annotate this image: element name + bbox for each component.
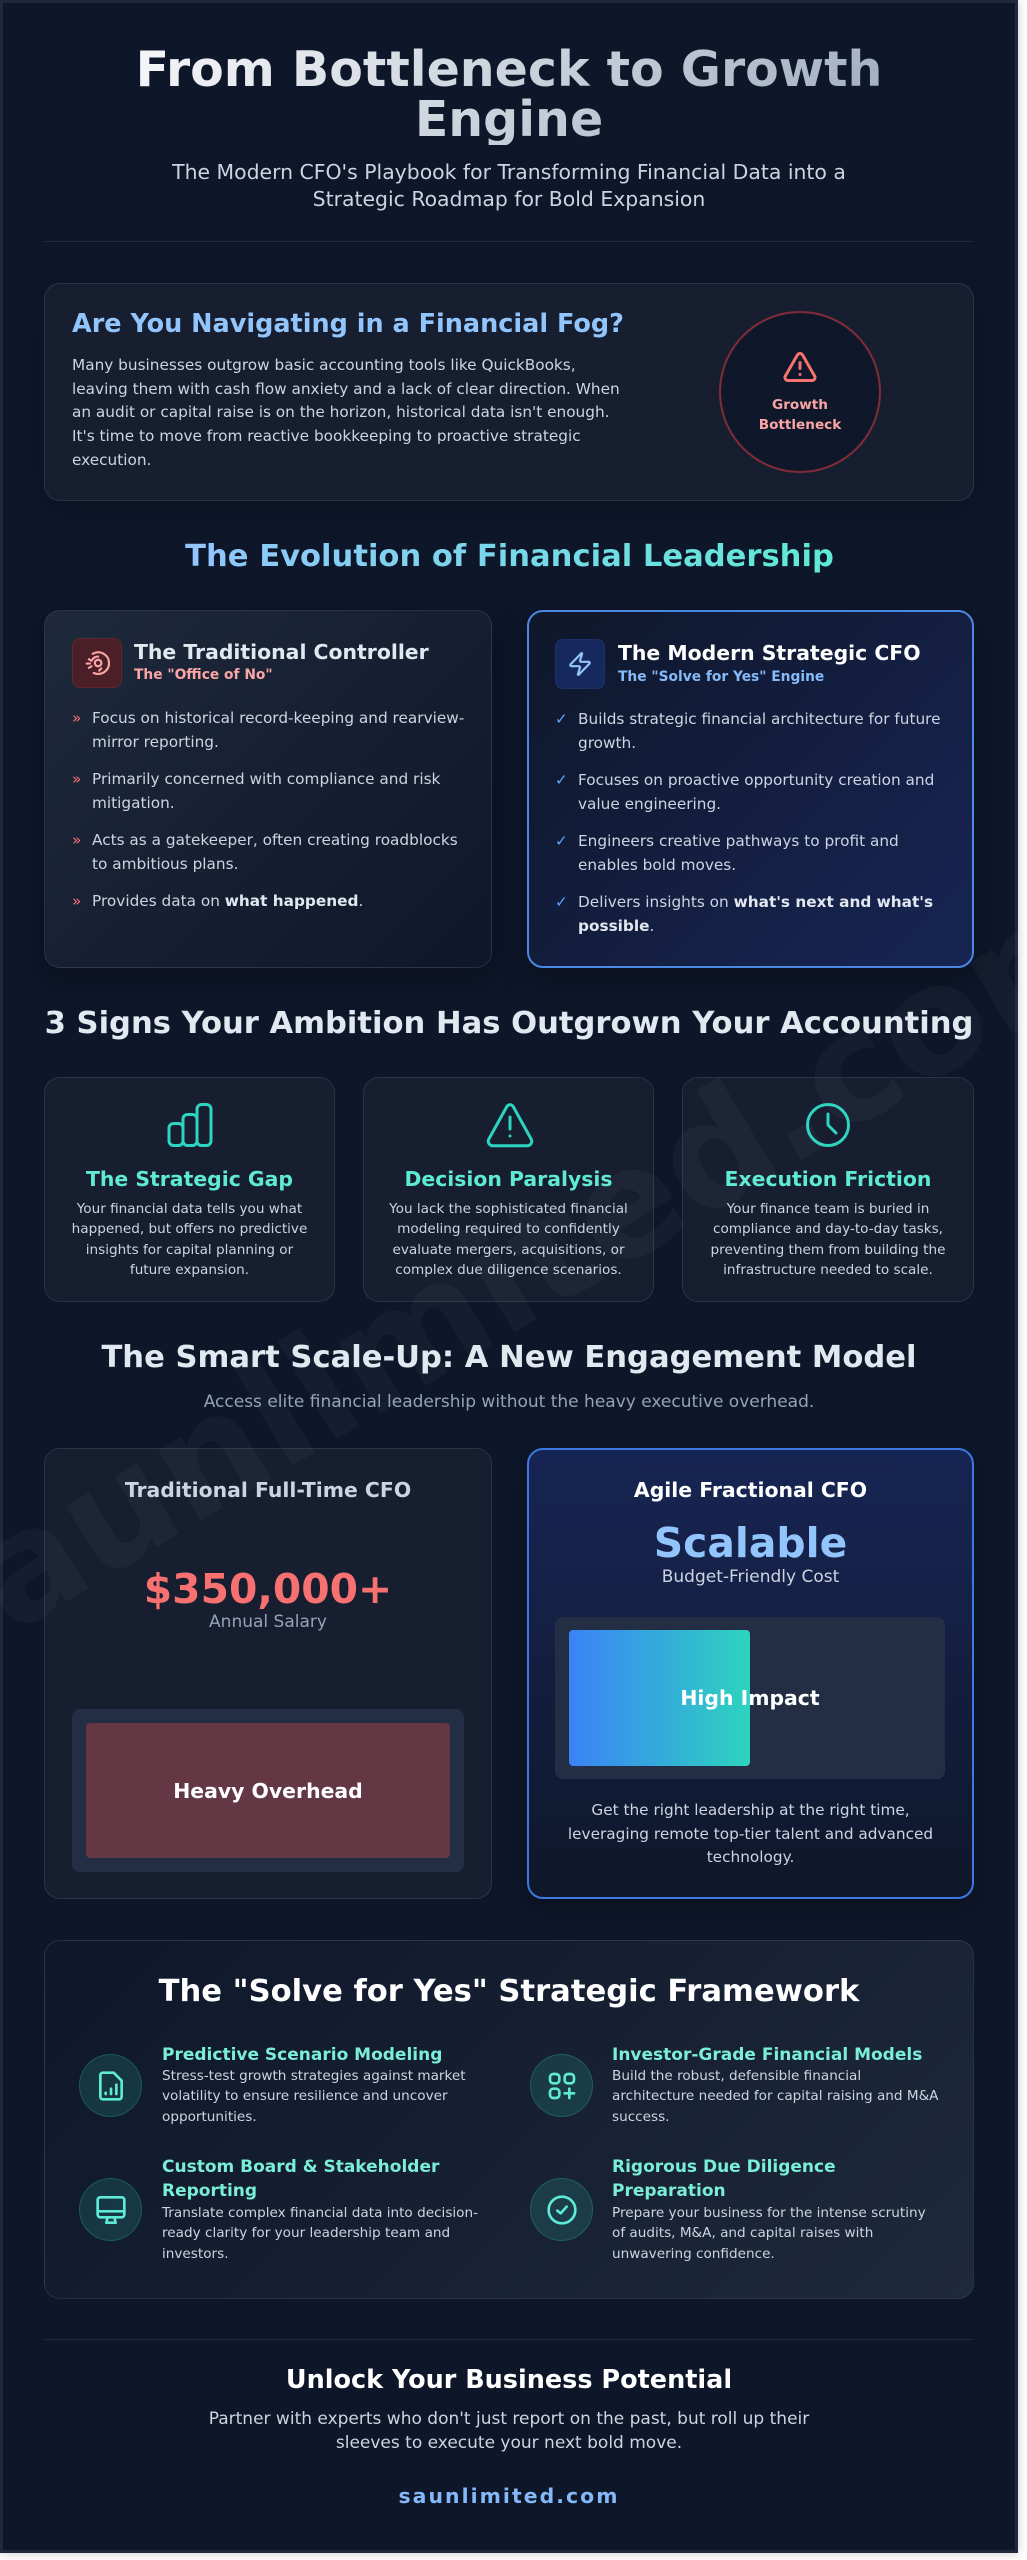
item: board reporting bbox=[162, 2157, 478, 2262]
icon: monitor bbox=[79, 2178, 142, 2241]
item heading: Custom Board & Stakeholder bbox=[162, 2157, 439, 2177]
trait 4: possible. bbox=[578, 917, 654, 935]
trait 4: Delivers insights on what's next and what's bbox=[578, 893, 933, 911]
item text bbox=[162, 2205, 478, 2262]
text: execution friction: compliance and day-to-day tasks, bbox=[713, 1221, 943, 1237]
trait 3 bbox=[555, 832, 899, 874]
callout: growth bottleneck bbox=[719, 311, 881, 473]
item text bbox=[612, 2205, 926, 2262]
link: website: saunlimited.com bbox=[398, 2484, 620, 2508]
heading: evolution: The Evolution of Financial Leadership bbox=[185, 539, 834, 574]
heading: traditional cfo: Traditional Full-Time CFO bbox=[125, 1478, 411, 1502]
panel: agile fractional cfo bbox=[527, 1448, 974, 1899]
item text: Build the robust, defensible financial bbox=[612, 2068, 861, 2084]
trait 3: Acts as a gatekeeper, often creating roadblocks bbox=[92, 831, 458, 849]
icon: check circle bbox=[530, 2178, 593, 2241]
bar label: High Impact bbox=[680, 1686, 820, 1710]
text: financial fog: leaving them with cash flow anxiety and a lack of clear direction. When bbox=[72, 380, 620, 398]
panel: decision paralysis bbox=[363, 1077, 654, 1302]
title: Engine bbox=[415, 91, 603, 148]
item text: volatility to ensure resilience and uncover bbox=[162, 2088, 448, 2104]
item heading: Preparation bbox=[612, 2181, 726, 2201]
text: call to action: sleeves to execute your next bold move. bbox=[336, 2433, 682, 2453]
label: growth bottleneck bbox=[759, 397, 842, 433]
trait 1: mirror reporting. bbox=[92, 733, 219, 751]
trait 1 bbox=[72, 709, 464, 751]
caption: budget-friendly: Budget-Friendly Cost bbox=[662, 1567, 839, 1587]
text: call to action bbox=[209, 2409, 810, 2453]
caption: annual salary: Annual Salary bbox=[209, 1612, 327, 1632]
text: decision paralysis: evaluate mergers, acquisitions, or bbox=[392, 1242, 625, 1258]
trait 1: Focus on historical record-keeping and rearview- bbox=[92, 709, 464, 727]
panel: traditional full-time cfo bbox=[44, 1448, 492, 1899]
list: controller traits: » bbox=[72, 892, 81, 910]
text: execution friction: Your finance team is buried in bbox=[727, 1201, 929, 1217]
item heading bbox=[612, 2157, 836, 2201]
panel: modern strategic cfo bbox=[527, 610, 974, 968]
panel: execution friction bbox=[682, 1077, 974, 1302]
text: financial fog: Many businesses outgrow basic accounting tools like QuickBooks, bbox=[72, 356, 576, 374]
heading: traditional controller: The Traditional Controller bbox=[134, 640, 429, 664]
icon: lightning badge bbox=[555, 639, 605, 689]
item: due diligence bbox=[612, 2157, 926, 2262]
item heading bbox=[162, 2157, 440, 2201]
list: cfo traits: ✓ bbox=[555, 893, 568, 911]
trait 4 bbox=[555, 893, 933, 935]
heading: modern cfo: The Modern Strategic CFO bbox=[618, 641, 921, 665]
icon: clock bbox=[806, 1103, 850, 1147]
text: agile cfo: technology. bbox=[707, 1848, 794, 1866]
subtitle: The Modern CFO's Playbook for Transforming Financial Data into a bbox=[172, 160, 846, 184]
item text: architecture needed for capital raising and M&A bbox=[612, 2088, 938, 2104]
text: financial fog: an audit or capital raise is on the horizon, historical data isn't enough. bbox=[72, 403, 610, 421]
heading: execution friction: Execution Friction bbox=[725, 1167, 931, 1191]
heading: smart scale-up: The Smart Scale-Up: A New Engagement Model bbox=[101, 1340, 917, 1375]
list: controller traits: » bbox=[72, 709, 81, 727]
heading: three signs: 3 Signs Your Ambition Has Outgrown Your Accounting bbox=[45, 1006, 973, 1041]
trait 3: Engineers creative pathways to profit and bbox=[578, 832, 899, 850]
text: execution friction: preventing them from building the bbox=[711, 1242, 945, 1258]
text: call to action: Partner with experts who don't just report on the past, but roll up their bbox=[209, 2409, 809, 2429]
text: decision paralysis: modeling required to confidently bbox=[397, 1221, 620, 1237]
trait 2: Focuses on proactive opportunity creation and bbox=[578, 771, 934, 789]
text: execution friction bbox=[711, 1201, 945, 1278]
heading: financial fog: Are You Navigating in a Financial Fog? bbox=[72, 309, 624, 339]
subheading: office of no: The "Office of No" bbox=[134, 667, 273, 683]
panel: traditional controller bbox=[44, 610, 492, 968]
trait 2: Primarily concerned with compliance and risk bbox=[92, 770, 440, 788]
panel: financial fog bbox=[44, 283, 974, 501]
heading: agile cfo: Agile Fractional CFO bbox=[634, 1478, 867, 1502]
title: From Bottleneck to Growth bbox=[136, 41, 882, 98]
label: growth bottleneck: Growth bbox=[772, 397, 828, 413]
item text: Translate complex financial data into decision- bbox=[162, 2205, 478, 2221]
item heading: Predictive Scenario Modeling bbox=[162, 2045, 442, 2065]
text: agile cfo: Get the right leadership at the right time, bbox=[591, 1801, 910, 1819]
text: decision paralysis bbox=[389, 1201, 628, 1278]
text: financial fog: It's time to move from reactive bookkeeping to proactive strategic bbox=[72, 427, 581, 445]
item heading: Reporting bbox=[162, 2181, 257, 2201]
trait 3: to ambitious plans. bbox=[92, 855, 238, 873]
item text: of audits, M&A, and capital raises with bbox=[612, 2225, 873, 2241]
bar: heavy overhead bbox=[72, 1709, 464, 1872]
item text bbox=[162, 2068, 466, 2125]
trait 1: growth. bbox=[578, 734, 636, 752]
figure: scalable: Scalable bbox=[654, 1519, 847, 1567]
icon: warning triangle bbox=[783, 352, 816, 382]
text: strategic gap: future expansion. bbox=[130, 1262, 249, 1278]
heading: decision paralysis: Decision Paralysis bbox=[404, 1167, 613, 1191]
text: strategic gap bbox=[72, 1201, 307, 1278]
item text: Prepare your business for the intense scrutiny bbox=[612, 2205, 926, 2221]
item: predictive scenario modeling bbox=[162, 2045, 466, 2125]
icon: document chart bbox=[79, 2054, 142, 2117]
icon: controller badge bbox=[72, 638, 122, 688]
trait 2: mitigation. bbox=[92, 794, 175, 812]
label: growth bottleneck: Bottleneck bbox=[759, 417, 841, 433]
item text: Stress-test growth strategies against market bbox=[162, 2068, 466, 2084]
text: decision paralysis: You lack the sophisticated financial bbox=[389, 1201, 628, 1217]
list: cfo traits: ✓ bbox=[555, 771, 568, 789]
subheading: solve for yes: The "Solve for Yes" Engine bbox=[618, 669, 824, 685]
icon: bars bbox=[168, 1103, 212, 1147]
trait 1 bbox=[555, 710, 941, 752]
panel: strategic gap bbox=[44, 1077, 335, 1302]
item text: ready clarity for your leadership team and bbox=[162, 2225, 450, 2241]
bar fill bbox=[569, 1630, 750, 1766]
subheading: smart scale-up: Access elite financial leadership without the heavy executive overhead. bbox=[204, 1392, 814, 1412]
heading: framework: The "Solve for Yes" Strategic Framework bbox=[159, 1974, 859, 2009]
text: agile cfo: leveraging remote top-tier talent and advanced bbox=[568, 1825, 933, 1843]
list: cfo traits: ✓ bbox=[555, 832, 568, 850]
bar: high impact bbox=[555, 1617, 945, 1779]
text: execution friction: infrastructure needed to scale. bbox=[723, 1262, 933, 1278]
icon: warning triangle bbox=[486, 1103, 534, 1148]
trait 2 bbox=[72, 770, 440, 812]
text: financial fog bbox=[72, 356, 620, 469]
panel: solve for yes framework bbox=[44, 1940, 974, 2299]
text: agile cfo bbox=[568, 1801, 933, 1866]
heading: call to action: Unlock Your Business Potential bbox=[286, 2365, 732, 2395]
trait 3: enables bold moves. bbox=[578, 856, 736, 874]
item text: unwavering confidence. bbox=[612, 2246, 775, 2262]
list: controller traits: » bbox=[72, 770, 81, 788]
list: cfo traits bbox=[555, 710, 941, 935]
text: strategic gap: Your financial data tells you what bbox=[77, 1201, 302, 1217]
list: controller traits: » bbox=[72, 831, 81, 849]
item text: investors. bbox=[162, 2246, 229, 2262]
list: controller traits bbox=[72, 709, 464, 910]
subtitle bbox=[172, 160, 846, 211]
item heading: Rigorous Due Diligence bbox=[612, 2157, 836, 2177]
heading: strategic gap: The Strategic Gap bbox=[86, 1167, 293, 1191]
item text bbox=[612, 2068, 938, 2125]
bar fill: Heavy Overhead bbox=[173, 1778, 363, 1802]
text: financial fog: execution. bbox=[72, 451, 151, 469]
subtitle: Strategic Roadmap for Bold Expansion bbox=[313, 187, 705, 211]
figure: salary: $350,000+ bbox=[144, 1565, 392, 1613]
trait 1: Builds strategic financial architecture for future bbox=[578, 710, 941, 728]
text: decision paralysis: complex due diligence scenarios. bbox=[395, 1262, 622, 1278]
trait 3 bbox=[72, 831, 458, 873]
text: strategic gap: happened, but offers no predictive bbox=[72, 1221, 307, 1237]
item heading: Investor-Grade Financial Models bbox=[612, 2045, 922, 2065]
trait 4: Provides data on what happened. bbox=[92, 892, 363, 910]
title bbox=[44, 45, 974, 145]
trait 2: value engineering. bbox=[578, 795, 721, 813]
icon: grid plus bbox=[530, 2054, 593, 2117]
list: cfo traits: ✓ bbox=[555, 710, 568, 728]
text: strategic gap: insights for capital planning or bbox=[86, 1242, 293, 1258]
item text: success. bbox=[612, 2109, 670, 2125]
bar fill bbox=[86, 1723, 450, 1858]
trait 2 bbox=[555, 771, 934, 813]
item text: opportunities. bbox=[162, 2109, 257, 2125]
item: investor-grade models bbox=[612, 2045, 938, 2125]
